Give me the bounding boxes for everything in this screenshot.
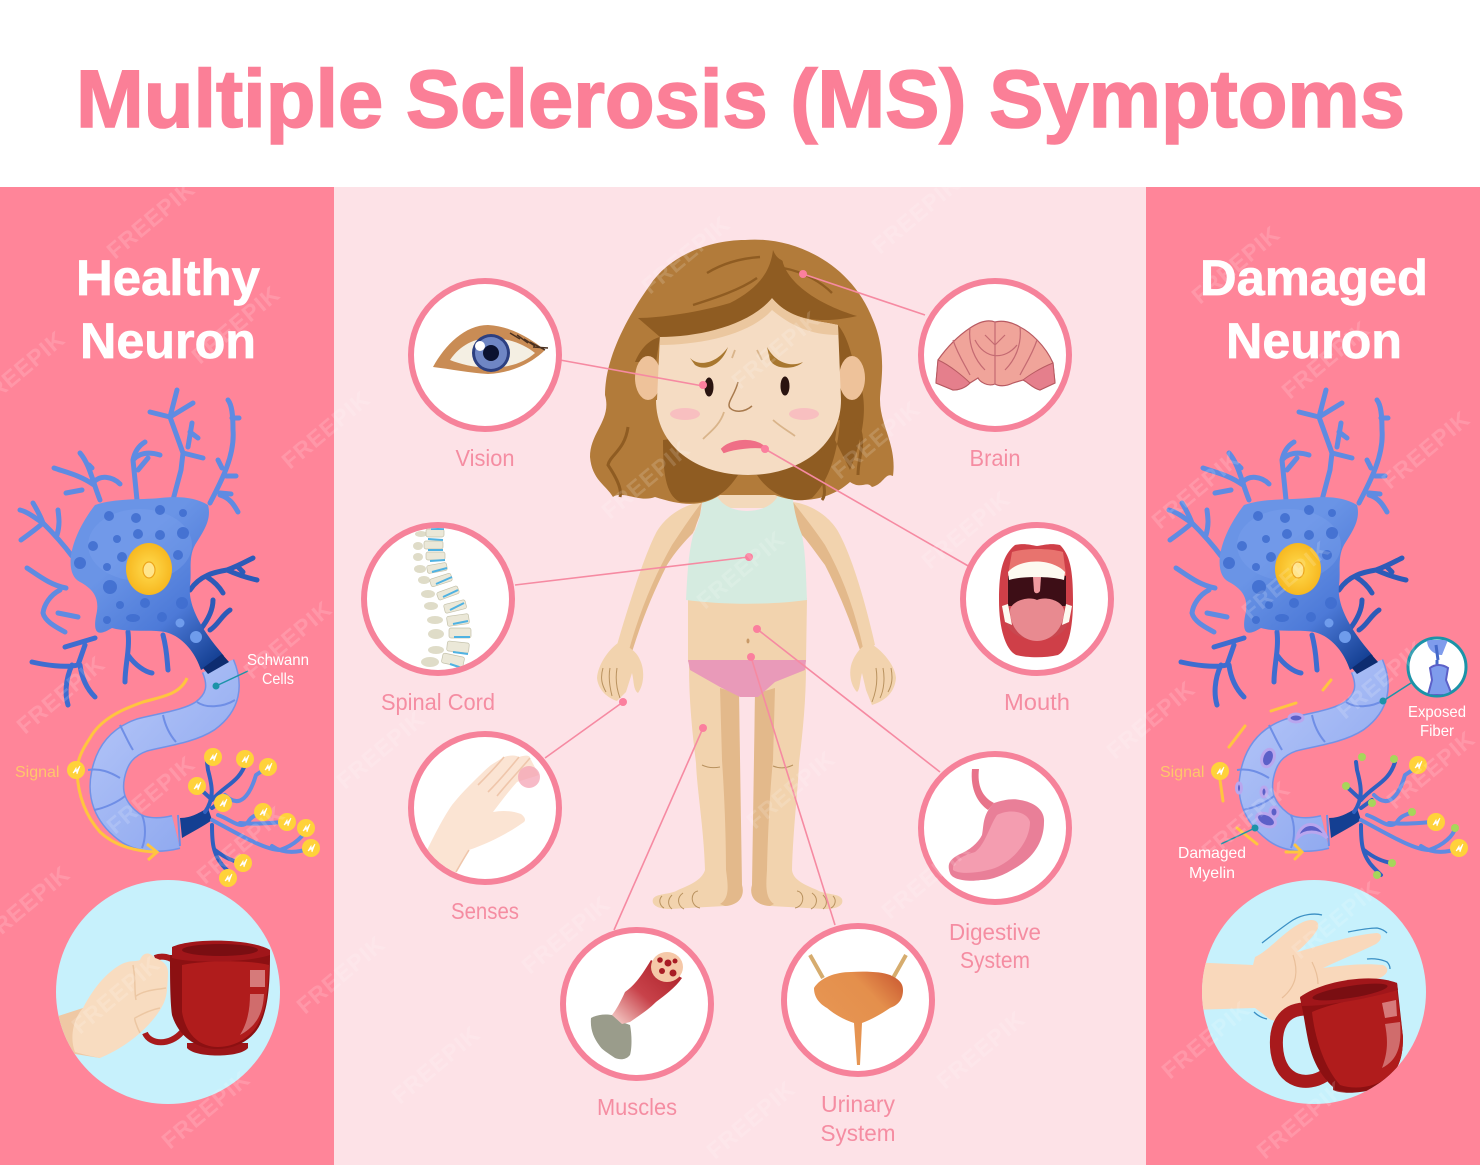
left arm [617,502,702,652]
watermarks: FREEPIK [1252,1075,1350,1164]
watermarks: FREEPIK [67,950,165,1039]
symptom: senses [411,734,559,924]
watermarks: FREEPIK [867,170,965,259]
label: signal: Signal [1160,764,1204,781]
label: damaged myelin: Damaged [1178,845,1246,862]
label: Digestive [949,919,1041,945]
watermarks: FREEPIK [932,1005,1030,1094]
watermarks: FREEPIK [292,930,390,1019]
cup [1300,978,1403,1093]
symptom: urinary system [784,926,932,1146]
legs [653,665,842,909]
forehead shadow [660,298,838,345]
watermarks: FREEPIK [1197,775,1295,864]
watermarks: FREEPIK [1147,445,1245,534]
heading: damaged neuron [1200,250,1428,369]
eyes [704,376,790,396]
label: Vision [456,445,514,471]
icon: mouth [999,544,1073,657]
right arm [793,502,875,650]
left panel background [0,187,334,1165]
label [949,919,1041,973]
discs [428,529,470,669]
label: Muscles [597,1094,677,1120]
watermarks: FREEPIK [917,485,1015,574]
label: Senses [451,898,519,924]
label: damaged myelin [1178,824,1258,882]
signal balls [1211,756,1468,857]
wrinkles [703,350,795,439]
symptom: mouth [963,525,1111,715]
toes and knee creases [660,765,835,909]
title: Multiple Sclerosis (MS) Symptoms [76,54,1405,145]
hand [58,954,168,1058]
watermarks: FREEPIK [12,650,110,739]
label: signal: Signal [15,764,59,781]
watermarks: FREEPIK [1332,635,1430,724]
eyebrows [690,347,803,368]
healthy hand holding cup [40,880,280,1104]
icon: spine [413,529,471,669]
label: System [820,1120,896,1146]
vertebrae [424,529,471,667]
heading: healthy neuron: Neuron [80,313,256,369]
title banner background [0,0,1480,187]
damaged neuron diagram [1160,390,1468,882]
torso [688,598,807,662]
watermarks: FREEPIK [157,1065,255,1154]
label: schwann cells [212,652,309,690]
hair fringe shadow [638,250,857,337]
watermarks: FREEPIK [102,750,200,839]
watermarks: FREEPIK [192,800,290,889]
right hand [850,643,896,705]
heading: damaged neuron: Damaged [1200,250,1428,306]
healthy neuron diagram [15,390,320,887]
watermarks: FREEPIK [692,525,790,614]
watermarks: FREEPIK [187,280,285,369]
watermarks: FREEPIK [277,385,375,474]
left hand [597,643,643,701]
signal balls [67,748,320,887]
watermarks: FREEPIK [702,1075,800,1164]
label: schwann cells: Schwann [247,652,309,669]
label: System [960,947,1030,973]
watermarks: FREEPIK [637,210,735,299]
watermarks: FREEPIK [517,890,615,979]
watermarks: FREEPIK [1187,220,1285,309]
icon: bladder [810,955,906,1065]
label: exposed fiber [1408,704,1466,740]
broken signal dashes [1220,680,1331,859]
hair strands top [693,257,832,305]
cheeks [670,408,819,420]
icon: hand [428,756,540,872]
symptom: brain [921,281,1069,471]
icon: stomach [949,769,1044,881]
watermarks: FREEPIK [727,305,825,394]
motion lines [1254,914,1390,1019]
neck [712,470,782,508]
symptom: spinal cord [364,525,512,715]
heading: healthy neuron [76,250,260,369]
center panel background [334,187,1146,1165]
label: exposed fiber: Exposed [1408,704,1466,721]
label: damaged myelin: Myelin [1189,865,1235,882]
right panel background [1146,187,1480,1165]
heading: healthy neuron: Healthy [76,250,260,306]
belly button [746,638,750,644]
symptom: digestive system [921,754,1069,973]
symptom: vision [411,281,559,471]
vertebral processes [413,531,444,667]
label [820,1091,896,1146]
hand [1190,920,1387,1021]
underwear [688,660,806,697]
damaged myelin patches [1236,714,1327,838]
hair back [590,240,894,504]
watermarks: FREEPIK [102,175,200,264]
watermarks: FREEPIK [827,395,925,484]
watermarks: FREEPIK [332,705,430,794]
ears [635,356,865,400]
label: Brain [970,445,1020,471]
watermarks: FREEPIK [742,745,840,834]
watermarks: FREEPIK [1287,875,1385,964]
watermarks: FREEPIK [877,835,975,924]
connector lines [515,270,970,930]
damaged hand dropping cup [1190,880,1426,1104]
hair strands [608,420,862,500]
inset: exposed fiber [1380,638,1466,704]
watermarks: FREEPIK [1237,535,1335,624]
watermarks: FREEPIK [1102,675,1200,764]
icon: muscle [591,952,683,1059]
label: Mouth [1004,689,1070,715]
watermarks: FREEPIK [387,1020,485,1109]
watermarks: FREEPIK [1157,995,1255,1084]
watermarks: FREEPIK [1382,725,1480,814]
watermarks: FREEPIK [1277,315,1375,404]
hair shadow [635,325,864,503]
symptom: muscles [563,930,711,1120]
watermarks: FREEPIK [597,435,695,524]
icon: brain [936,321,1055,390]
label: Spinal Cord [381,689,495,715]
cup [170,941,270,1056]
label: Urinary [821,1091,895,1117]
label: schwann cells: Cells [262,671,294,688]
heading: damaged neuron: Neuron [1226,313,1402,369]
watermarks: FREEPIK [239,595,337,684]
mouth [722,441,765,452]
cup handle [1276,1009,1324,1081]
nose [729,382,752,411]
signal arrow [77,678,187,860]
icon: eye [433,325,548,374]
girl figure [590,240,896,909]
finger lines [602,668,892,702]
cup handle [145,957,182,1042]
tank top [686,488,807,604]
label: exposed fiber: Fiber [1420,723,1455,740]
watermarks: FREEPIK [1377,405,1475,494]
hand creases [1282,955,1318,998]
face [656,298,841,475]
green axon tips [1342,753,1459,879]
